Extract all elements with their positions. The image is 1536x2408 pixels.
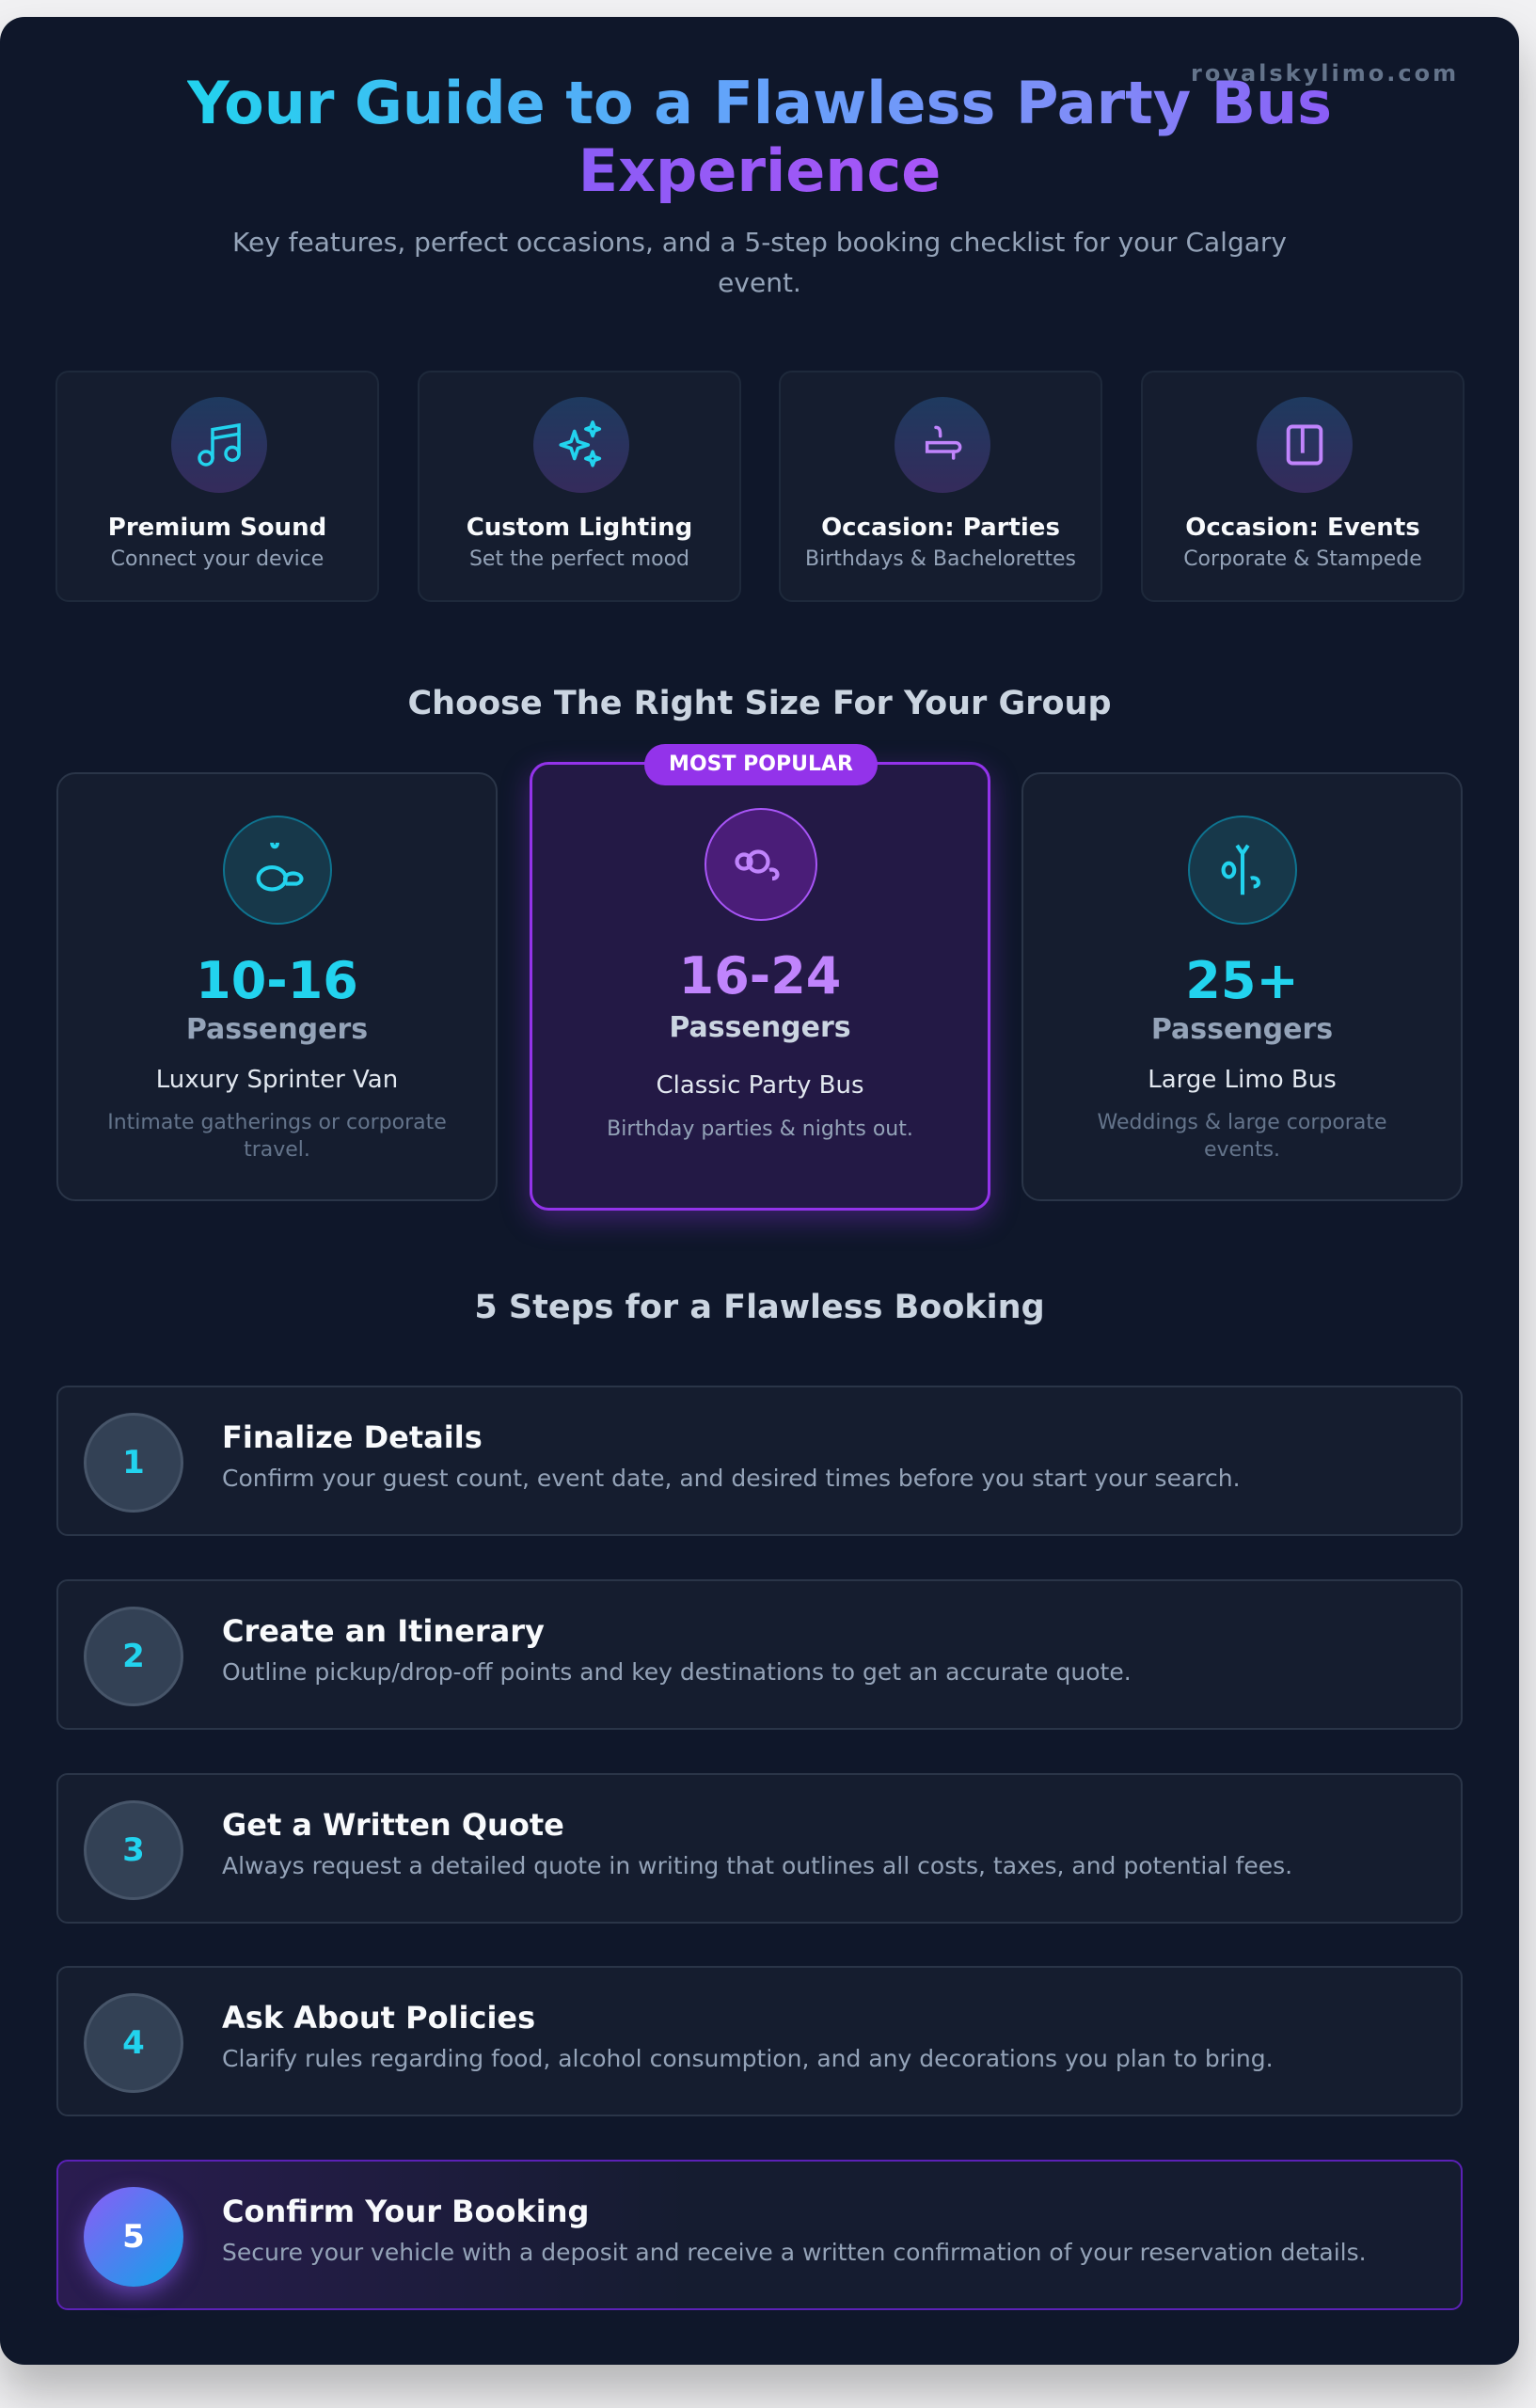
step 5	[56, 2160, 1463, 2310]
step 3: Get a Written Quote	[222, 1807, 564, 1843]
panel: 25+	[1021, 772, 1463, 1201]
icon: music	[171, 397, 267, 493]
title: Your Guide to a Flawless Party Bus	[187, 69, 1332, 137]
panel: 16-24 most popular: Classic Party Bus	[656, 1071, 864, 1100]
feature: parties: Birthdays & Bachelorettes	[805, 547, 1076, 571]
feature: premium sound: Connect your device	[111, 547, 324, 571]
heading: group size: Choose The Right Size For Your Group	[407, 685, 1112, 722]
panel: 10-16: Luxury Sprinter Van	[156, 1066, 398, 1094]
panel: 25+: 25+	[1185, 951, 1299, 1010]
step 2: Create an Itinerary	[222, 1613, 545, 1649]
title: Experience	[578, 136, 941, 205]
feature: parties	[779, 371, 1102, 602]
panel: 25+: Weddings & large corporate events.	[1097, 1111, 1386, 1162]
panel: 16-24 most popular: Birthday parties & nights out.	[607, 1117, 913, 1141]
step 4: Ask About Policies	[222, 2000, 535, 2036]
feature: parties: Occasion: Parties	[821, 514, 1060, 542]
step 2: Outline pickup/drop-off points and key destinations to get an accurate quote.	[222, 1658, 1132, 1686]
panel: 16-24 most popular: 16-24	[679, 946, 841, 1006]
subtitle: Key features, perfect occasions, and a 5-step booking checklist for your Calgary event.	[232, 227, 1287, 298]
icon: large group	[1188, 816, 1297, 925]
step 3	[56, 1773, 1463, 1924]
badge	[644, 744, 878, 785]
feature: premium sound	[55, 371, 379, 602]
watermark: royalskylimo.com	[1191, 60, 1459, 87]
step 2	[56, 1579, 1463, 1730]
heading: steps: 5 Steps for a Flawless Booking	[474, 1289, 1045, 1326]
panel: 16-24 most popular: Passengers	[669, 1011, 851, 1044]
step 4	[56, 1966, 1463, 2116]
step 2: 2	[122, 1638, 145, 1675]
step 4: Clarify rules regarding food, alcohol consumption, and any decorations you plan to bring.	[222, 2045, 1274, 2072]
feature: events: Occasion: Events	[1185, 514, 1420, 542]
step 4: 4	[122, 2024, 145, 2062]
icon: small group	[223, 816, 332, 925]
panel: 25+: Large Limo Bus	[1148, 1066, 1337, 1094]
feature: custom lighting	[418, 371, 741, 602]
feature: custom lighting: Set the perfect mood	[469, 547, 689, 571]
icon: events	[1257, 397, 1353, 493]
icon: sparkles	[533, 397, 629, 493]
badge: MOST POPULAR	[669, 752, 853, 776]
feature: events: Corporate & Stampede	[1183, 547, 1422, 571]
title	[187, 69, 1332, 205]
panel: 10-16: Passengers	[186, 1013, 368, 1046]
panel: 10-16	[56, 772, 498, 1201]
step 5: 5	[122, 2218, 145, 2256]
panel: 10-16: Intimate gatherings or corporate travel.	[107, 1111, 447, 1162]
step 3: 3	[122, 1831, 145, 1869]
panel: 16-24 most popular	[530, 762, 990, 1211]
feature: custom lighting: Custom Lighting	[467, 514, 692, 542]
step 1	[56, 1386, 1463, 1536]
step 3: Always request a detailed quote in writing that outlines all costs, taxes, and potential fees.	[222, 1852, 1292, 1879]
feature: premium sound: Premium Sound	[108, 514, 326, 542]
step 1: Finalize Details	[222, 1419, 483, 1455]
feature: events	[1141, 371, 1465, 602]
panel: 10-16: 10-16	[196, 951, 358, 1010]
step 1: 1	[122, 1444, 145, 1481]
icon: party	[895, 397, 990, 493]
step 5: Secure your vehicle with a deposit and receive a written confirmation of your reservation details.	[222, 2239, 1367, 2266]
panel: 25+: Passengers	[1151, 1013, 1333, 1046]
step 5: Confirm Your Booking	[222, 2194, 589, 2229]
step 1: Confirm your guest count, event date, and desired times before you start your search.	[222, 1465, 1241, 1492]
icon: medium group	[705, 808, 817, 921]
